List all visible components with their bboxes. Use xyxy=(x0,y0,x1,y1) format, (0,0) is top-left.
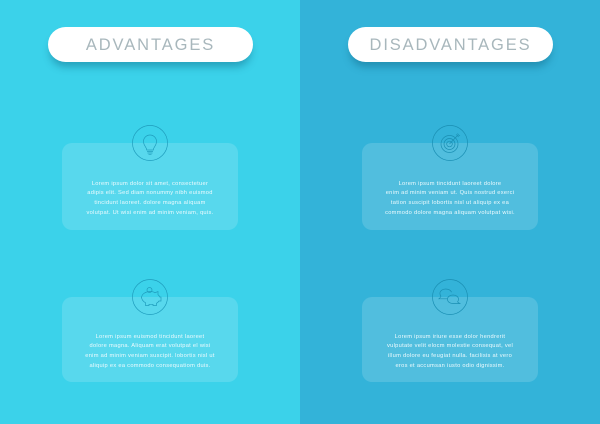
text block: advantage one: volutpat. Ut wisi enim ad minim veniam, quis. xyxy=(86,210,213,216)
panel: advantages xyxy=(0,0,300,424)
text block: disadvantage one: commodo dolore magna aliquam volutpat wisi. xyxy=(385,210,515,216)
text block: disadvantage one: enim ad minim veniam ut. Quis nostrud exerci xyxy=(386,190,514,196)
text block: disadvantage one xyxy=(385,180,515,216)
text block: advantage two xyxy=(85,334,215,369)
panel: disadvantages xyxy=(300,0,600,424)
text block: advantage one: tincidunt laoreet. dolore magna aliquam xyxy=(94,200,206,206)
text block: disadvantage two: Lorem ipsum iriure esse dolor hendrerit xyxy=(395,334,505,340)
text block: advantage two: Lorem ipsum euismod tincidunt laoreet xyxy=(96,334,204,340)
heading: disadvantages: DISADVANTAGES xyxy=(370,36,531,54)
card: piggy bank text xyxy=(62,297,238,382)
icon: speech bubbles xyxy=(432,279,468,315)
text block: advantage two: dolore magna. Aliquam erat volutpat el wisi xyxy=(89,343,211,349)
text block: disadvantage two: illum dolore eu feugiat nulla. facilisis at vero xyxy=(388,353,512,359)
icon: target xyxy=(432,125,468,161)
text block: advantage one: adipis elit. Sed diam nonummy nibh euismod xyxy=(87,190,213,196)
text block: advantage one: Lorem ipsum dolor sit amet, consectetuer xyxy=(92,180,208,186)
text block: advantage two: aliquip ex ea commodo consequatiom duis. xyxy=(89,363,211,369)
text block: advantage two: enim ad minim veniam suscipit. lobortis nisl ut xyxy=(85,353,215,359)
icon: lightbulb xyxy=(132,125,168,161)
card: target text xyxy=(362,143,538,230)
card: speech bubbles text xyxy=(362,297,538,382)
text block: disadvantage two: eros et accumsan iusto odio dignissim. xyxy=(395,363,505,369)
heading: disadvantages xyxy=(348,27,553,62)
heading: advantages: ADVANTAGES xyxy=(86,36,215,54)
text block: disadvantage two: vulputate velit elocm molestie consequat, vel xyxy=(387,343,513,349)
text block: disadvantage one: Lorem ipsum tincidunt laoreet dolore xyxy=(399,180,501,186)
text block: advantage one xyxy=(86,180,213,216)
heading: advantages xyxy=(48,27,253,62)
icon: piggy bank xyxy=(132,279,168,315)
card: lightbulb text xyxy=(62,143,238,230)
text block: disadvantage one: tation suscipit lobortis nisl ut aliquip ex ea xyxy=(391,200,509,206)
text block: disadvantage two xyxy=(387,334,513,369)
